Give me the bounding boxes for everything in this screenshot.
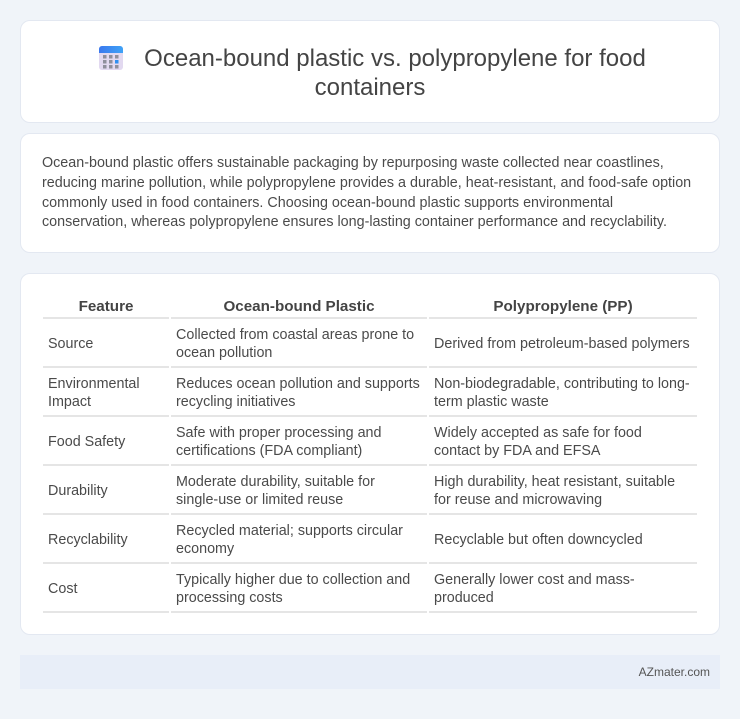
row: Cost: Generally lower cost and mass- — [434, 572, 635, 588]
text block: description — [42, 155, 691, 230]
title — [144, 45, 646, 101]
row: Food Safety — [48, 425, 642, 459]
row: Cost: Cost — [48, 581, 77, 597]
row: Environmental Impact — [48, 376, 690, 410]
row: Cost: processing costs — [176, 590, 283, 606]
row: Cost: Typically higher due to collection and — [176, 572, 410, 588]
row: Recyclability — [48, 523, 643, 557]
row: Durability: Moderate durability, suitable for — [176, 474, 375, 490]
row: Durability: Durability — [48, 483, 108, 499]
row: Recyclability: Recycled material; supports circular — [176, 523, 403, 539]
panel: title card — [20, 20, 720, 123]
row: Food Safety: Safe with proper processing and — [176, 425, 382, 441]
text block: description: Ocean-bound plastic offers sustainable packaging by repurposing waste collected near coastlines, — [42, 155, 664, 171]
title: containers — [315, 74, 425, 101]
footer text: AZmater.com — [639, 665, 710, 679]
row: Food Safety: Food Safety — [48, 434, 125, 450]
icon: calendar — [99, 46, 123, 70]
row: Environmental Impact: Impact — [48, 394, 91, 410]
row: Recyclability: economy — [176, 541, 234, 557]
row: Environmental Impact: Reduces ocean pollution and supports — [176, 376, 420, 392]
row: Cost: produced — [434, 590, 494, 606]
table: comparison — [43, 298, 697, 613]
panel: comparison table card — [20, 273, 720, 635]
heading: Feature: Feature — [79, 298, 133, 315]
row: Environmental Impact: Environmental — [48, 376, 140, 392]
text block: description: commonly used in food containers. Choosing ocean-bound plastic supports environmental — [42, 195, 613, 211]
row: Food Safety: Widely accepted as safe for food — [434, 425, 642, 441]
row: Cost — [48, 572, 635, 606]
footer bar — [20, 655, 720, 689]
row: Source: Derived from petroleum-based polymers — [434, 336, 690, 352]
row: Recyclability: Recyclability — [48, 532, 128, 548]
text block: description: conservation, whereas polypropylene ensures long-lasting container performance and recyclability. — [42, 214, 667, 230]
row: Source: ocean pollution — [176, 345, 272, 361]
row: Source: Collected from coastal areas prone to — [176, 327, 414, 343]
row: Environmental Impact: term plastic waste — [434, 394, 549, 410]
row: Food Safety: certifications (FDA compliant) — [176, 443, 362, 459]
row: Durability: for reuse and microwaving — [434, 492, 602, 508]
heading: Ocean-bound Plastic: Ocean-bound Plastic — [223, 298, 375, 315]
row: Durability — [48, 474, 675, 508]
row: Durability: High durability, heat resistant, suitable — [434, 474, 675, 490]
row: Source — [48, 327, 690, 361]
title: Ocean-bound plastic vs. polypropylene for food — [144, 45, 646, 72]
row: Source: Source — [48, 336, 93, 352]
row: Environmental Impact: recycling initiatives — [176, 394, 295, 410]
row: Recyclability: Recyclable but often downcycled — [434, 532, 643, 548]
heading: Polypropylene (PP): Polypropylene (PP) — [493, 298, 633, 315]
panel: description — [20, 133, 720, 253]
row: Food Safety: contact by FDA and EFSA — [434, 443, 600, 459]
row: Durability: single-use or limited reuse — [176, 492, 343, 508]
text block: description: reducing marine pollution, while polypropylene provides a durable, heat-resistant, and food-safe option — [42, 175, 691, 191]
row: Environmental Impact: Non-biodegradable, contributing to long- — [434, 376, 690, 392]
